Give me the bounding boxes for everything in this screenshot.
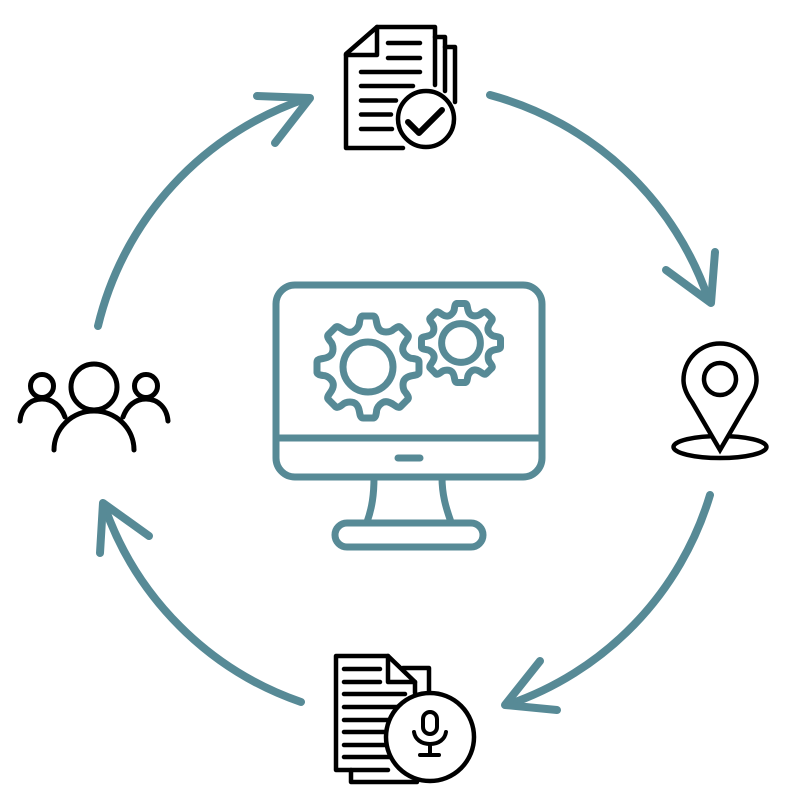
arrow: top-left, people to checked document (98, 96, 310, 326)
arrow: bottom-left, audio document to people (100, 503, 301, 702)
arrow: top-right, checked document to location (490, 95, 715, 303)
icon: documents with check mark (346, 27, 455, 148)
icon: group of people (20, 364, 168, 450)
icon: location pin (674, 344, 766, 458)
icon: small gear (415, 297, 507, 389)
icon: documents with microphone (336, 656, 474, 782)
icon: large gear (309, 308, 427, 426)
icon: microphone (414, 712, 446, 755)
arrow: bottom-right, location to audio document (505, 495, 710, 710)
icon: computer monitor with gears (276, 285, 542, 547)
